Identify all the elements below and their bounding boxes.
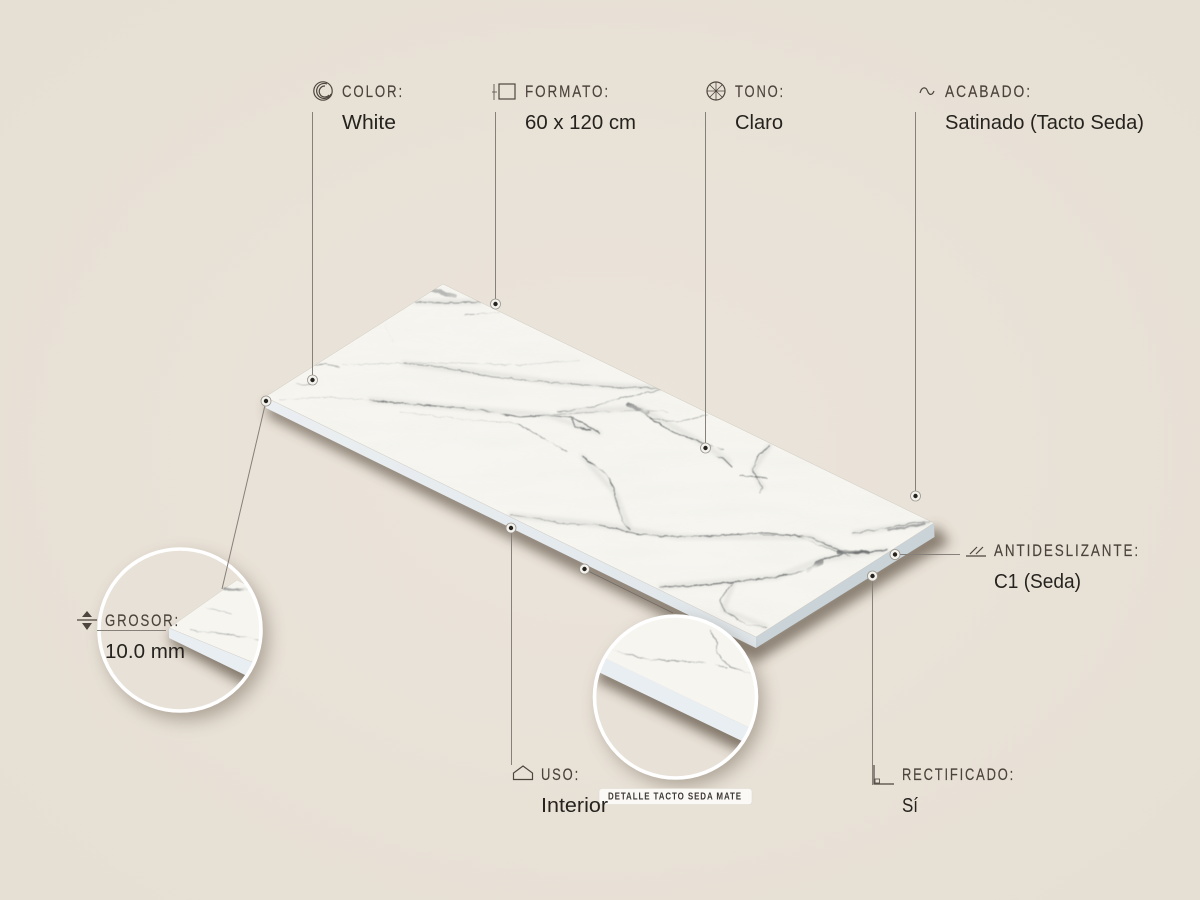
spec: grosor — [77, 611, 185, 663]
spec: rectificado — [874, 765, 1015, 817]
spec: color: White — [342, 112, 396, 134]
spec: formato — [492, 82, 636, 134]
spec: uso — [514, 765, 608, 817]
callout dot: grosor — [261, 396, 271, 406]
icon: color circle — [314, 82, 332, 100]
spec: tono: TONO: — [735, 82, 785, 101]
slab shadow — [268, 400, 950, 662]
icon: slip lines — [966, 547, 986, 556]
detail caption: DETALLE TACTO SEDA MATE — [608, 790, 742, 802]
icon: thickness arrows — [77, 611, 97, 630]
spec: rectificado: Sí — [902, 795, 918, 817]
vein halos — [370, 302, 930, 627]
callout lines — [312, 112, 960, 785]
callout dots — [308, 299, 920, 581]
spec: uso: USO: — [541, 765, 580, 784]
slab top surface — [265, 284, 934, 637]
spec: tono: Claro — [735, 112, 783, 134]
spec: color: COLOR: — [342, 82, 404, 101]
spec: acabado: Satinado (Tacto Seda) — [945, 112, 1144, 134]
spec: antideslizante: ANTIDESLIZANTE: — [994, 541, 1140, 560]
icon: satin wave — [920, 88, 934, 94]
spec: formato: FORMATO: — [525, 82, 610, 101]
spec: antideslizante — [966, 541, 1140, 593]
surface texture — [250, 270, 950, 660]
icon: tone wheel — [707, 82, 725, 100]
detail caption — [599, 788, 752, 804]
spec: uso: Interior — [541, 795, 608, 817]
spec: grosor: GROSOR: — [105, 611, 180, 630]
spec: grosor: 10.0 mm — [105, 641, 185, 663]
spec: antideslizante: C1 (Seda) — [994, 571, 1081, 593]
marble slab — [250, 270, 950, 662]
icon: house — [514, 766, 532, 780]
spec: color — [314, 82, 404, 134]
spec: acabado: ACABADO: — [945, 82, 1032, 101]
icon: right angle — [874, 765, 894, 784]
icon: format square — [492, 84, 515, 100]
spec: tono — [707, 82, 785, 134]
zoom circle: thickness detail — [97, 396, 272, 720]
spec: acabado — [920, 82, 1144, 134]
marble veins — [280, 289, 930, 627]
zoom circle: surface detail — [590, 600, 770, 786]
spec: formato: 60 x 120 cm — [525, 112, 636, 134]
slab left edge — [265, 397, 756, 648]
slab right edge — [756, 523, 934, 648]
spec: rectificado: RECTIFICADO: — [902, 765, 1015, 784]
